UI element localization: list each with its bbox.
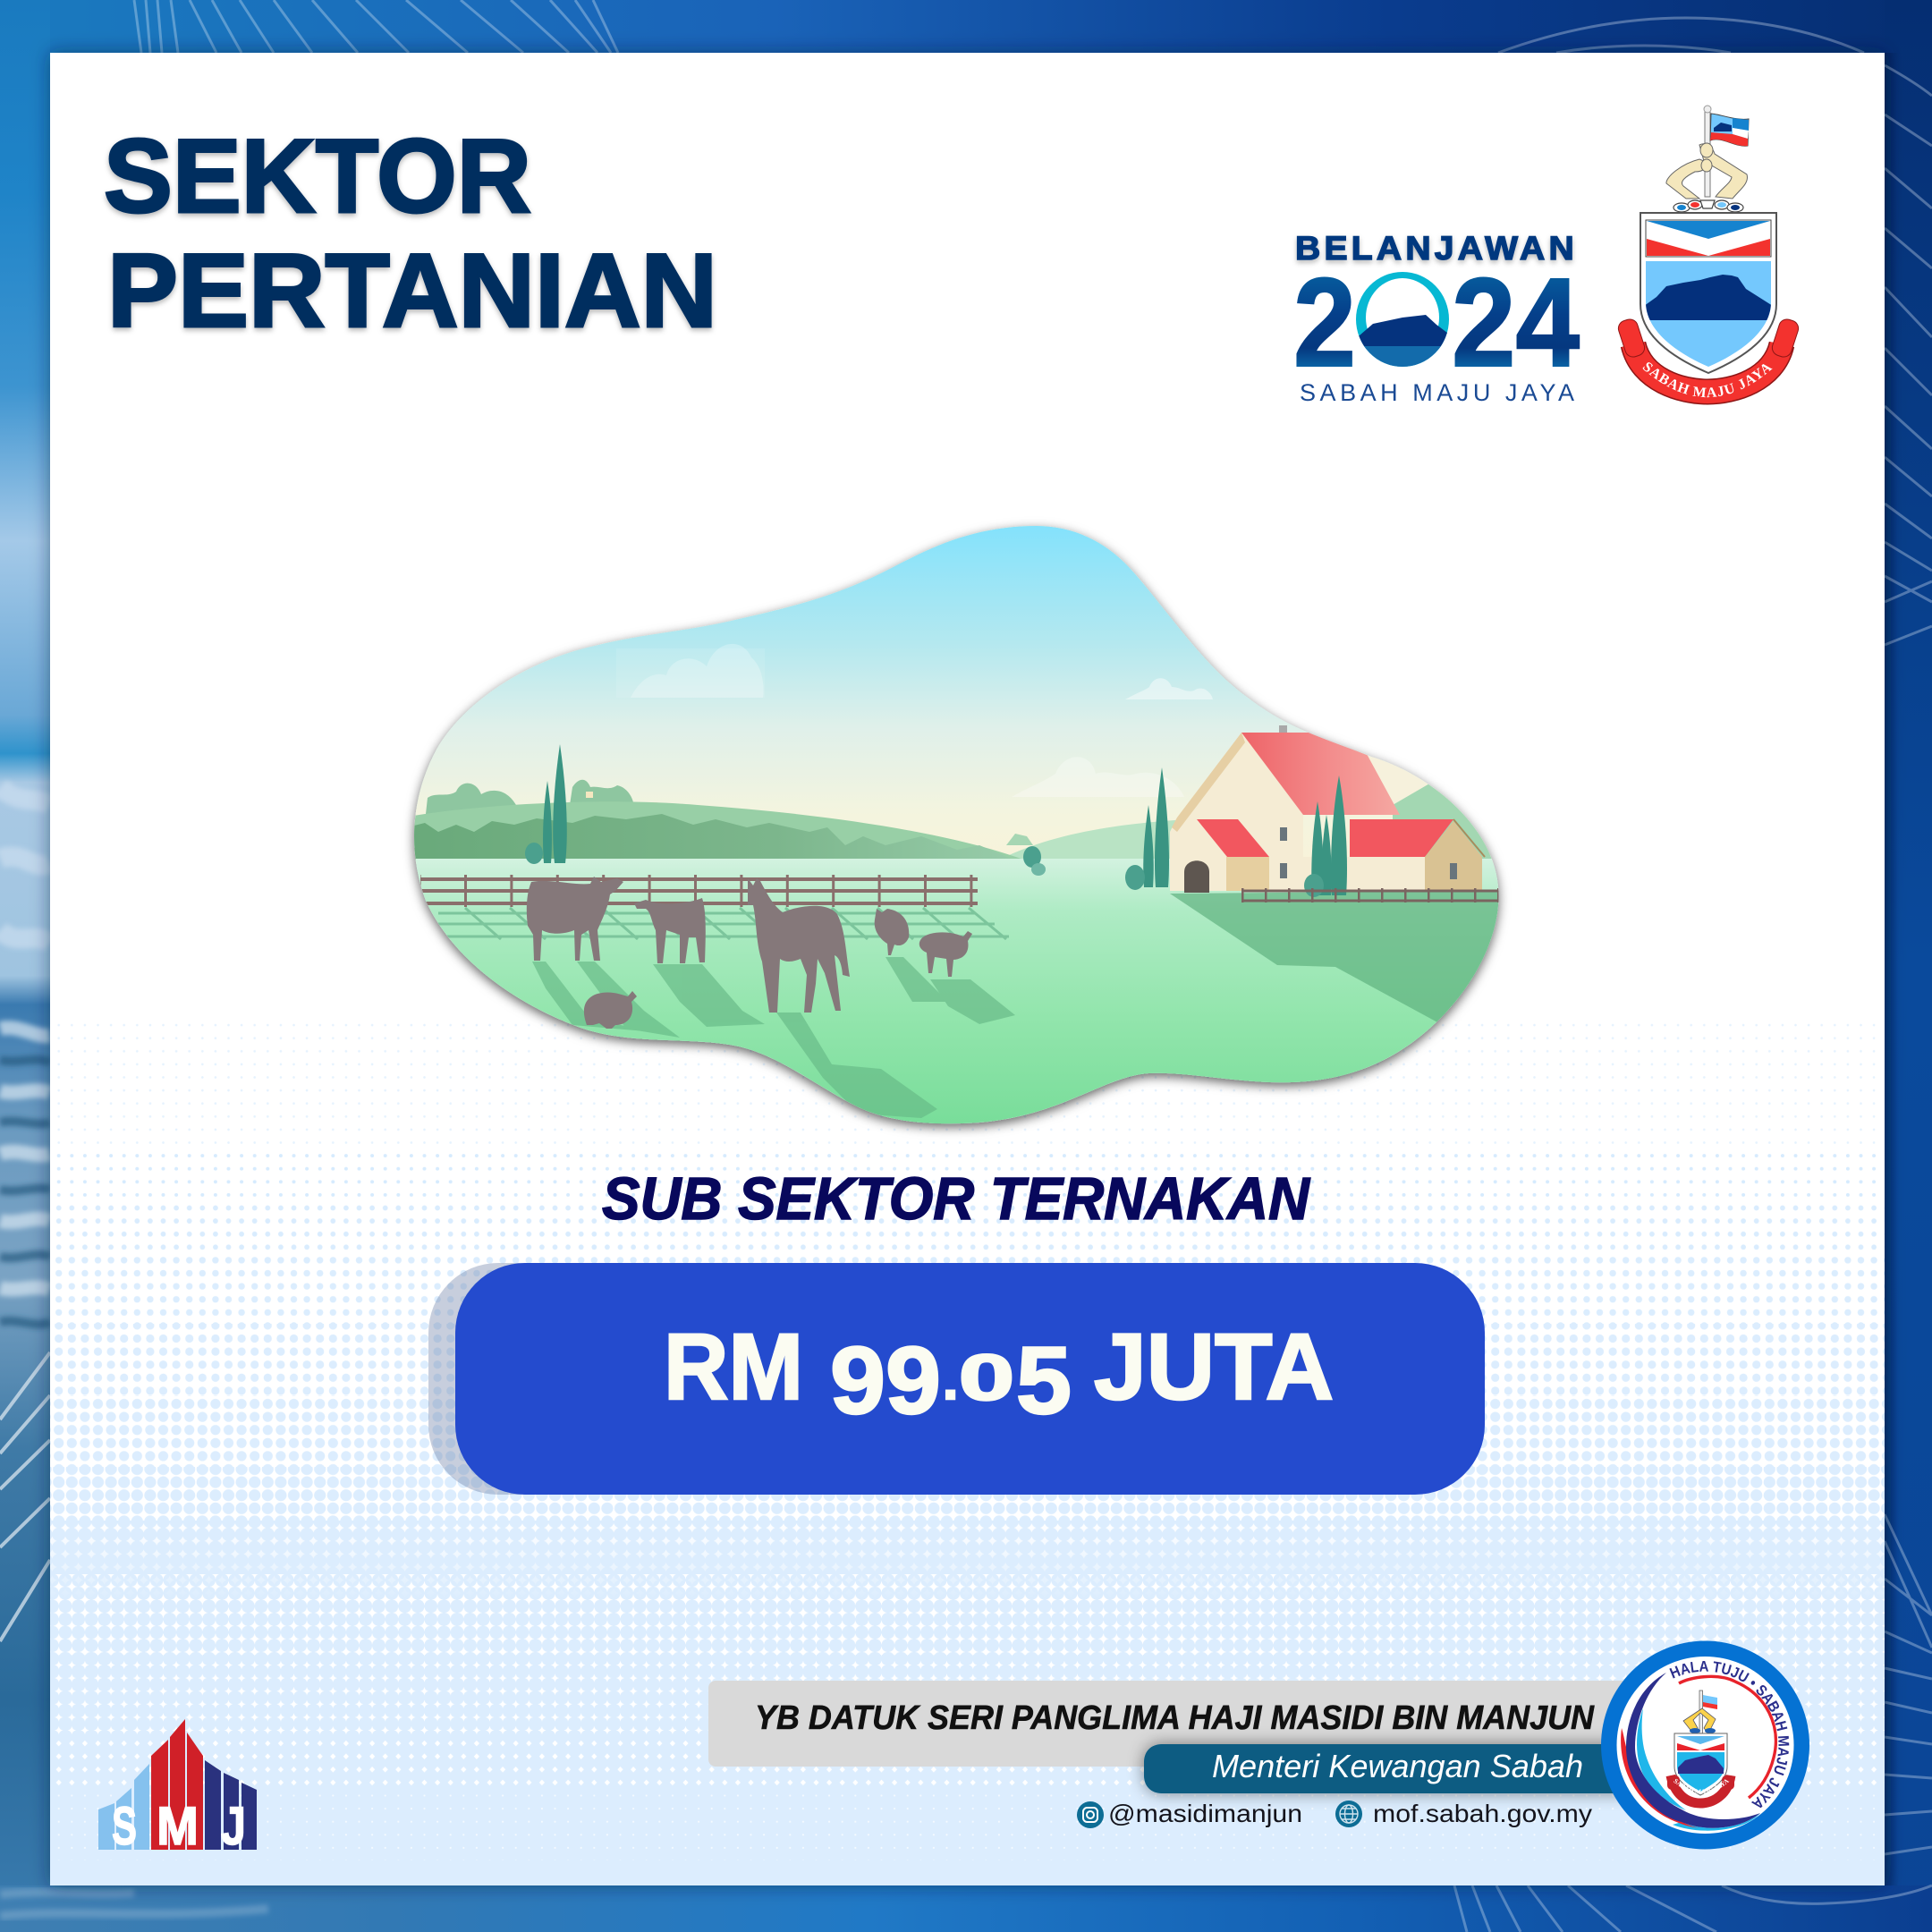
farmhouse bbox=[1170, 725, 1512, 893]
logo: Belanjawan 2024: SABAH MAJU JAYA bbox=[1300, 379, 1574, 406]
cypress trees and shrubs bbox=[525, 744, 1169, 890]
illustration: farm scene inside organic blob bbox=[402, 519, 1512, 1127]
logo: Belanjawan 2024: 2 bbox=[1293, 251, 1356, 393]
animal: cow bbox=[527, 877, 623, 961]
logo: SMJ: M bbox=[157, 1796, 199, 1856]
animals bbox=[527, 877, 972, 1029]
logo: SMJ: J bbox=[221, 1796, 246, 1856]
animal: sheep side bbox=[919, 931, 972, 977]
icon: flag and pole bbox=[1704, 106, 1749, 197]
animal: horse bbox=[748, 878, 850, 1013]
logo: Sabah state crest bbox=[1617, 106, 1800, 404]
value pill: allocation amount: 0 bbox=[959, 1343, 1014, 1414]
icon: crest beads bbox=[1674, 200, 1743, 212]
animal: calf bbox=[634, 898, 706, 963]
ribbon with motto: SABAH MAJU JAYA bbox=[1642, 362, 1773, 397]
name banner: minister bbox=[708, 1681, 1630, 1767]
title: SEKTOR bbox=[104, 117, 531, 234]
cypress trees by the house bbox=[1304, 775, 1347, 897]
value pill: allocation amount: 5 bbox=[1016, 1326, 1072, 1434]
title: PERTANIAN bbox=[107, 232, 717, 349]
animal: sheep foreground bbox=[584, 991, 637, 1029]
shield bbox=[1640, 213, 1776, 373]
fence: left bbox=[420, 879, 978, 903]
social: instagram handle: @masidimanjun bbox=[1108, 1800, 1302, 1827]
logo: Belanjawan 2024: 24 bbox=[1452, 251, 1580, 393]
crescents bbox=[1621, 1673, 1775, 1831]
fence: right bbox=[1241, 891, 1503, 901]
value pill: allocation amount: . bbox=[943, 1350, 958, 1411]
logo: SMJ bbox=[98, 1719, 257, 1856]
animal: sheep standing bbox=[875, 909, 909, 955]
value pill: allocation amount: RM bbox=[664, 1315, 803, 1419]
name banner: minister: YB DATUK SERI PANGLIMA HAJI MASIDI BIN MANJUN bbox=[755, 1699, 1595, 1737]
title bbox=[104, 117, 717, 349]
fence shadows bbox=[438, 908, 1009, 939]
shadows on ground bbox=[532, 891, 1512, 1118]
mini crest: SABAH MAJU JAYA bbox=[1674, 1778, 1730, 1794]
value pill: allocation amount: 99 bbox=[830, 1326, 941, 1434]
heading: sub sector: SUB SEKTOR TERNAKAN bbox=[602, 1165, 1311, 1233]
logo: SMJ: S bbox=[112, 1796, 137, 1856]
title banner: position bbox=[1144, 1744, 1628, 1793]
title banner: position: Menteri Kewangan Sabah bbox=[1212, 1748, 1583, 1784]
value pill: allocation amount: JUTA bbox=[1094, 1315, 1334, 1419]
clouds bbox=[429, 644, 1213, 797]
mini crest bbox=[1665, 1690, 1735, 1809]
badge: Hala Tuju Sabah Maju Jaya bbox=[1601, 1640, 1809, 1850]
forest band on hill bbox=[407, 814, 1015, 860]
logo: Belanjawan 2024: BELANJAWAN bbox=[1295, 230, 1578, 267]
social: website: mof.sabah.gov.my bbox=[1373, 1800, 1592, 1827]
distant hills and bushes bbox=[402, 780, 1190, 860]
sky bbox=[402, 519, 1512, 863]
ground bbox=[402, 859, 1512, 1127]
ribbon with motto bbox=[1617, 318, 1800, 404]
value pill: allocation amount bbox=[428, 1263, 1485, 1495]
badge: Hala Tuju Sabah Maju Jaya: HALA TUJU • SABAH MAJU JAYA bbox=[1669, 1661, 1789, 1809]
icon: arms holding the flag bbox=[1666, 143, 1748, 199]
logo: Belanjawan 2024 bbox=[1293, 230, 1580, 406]
